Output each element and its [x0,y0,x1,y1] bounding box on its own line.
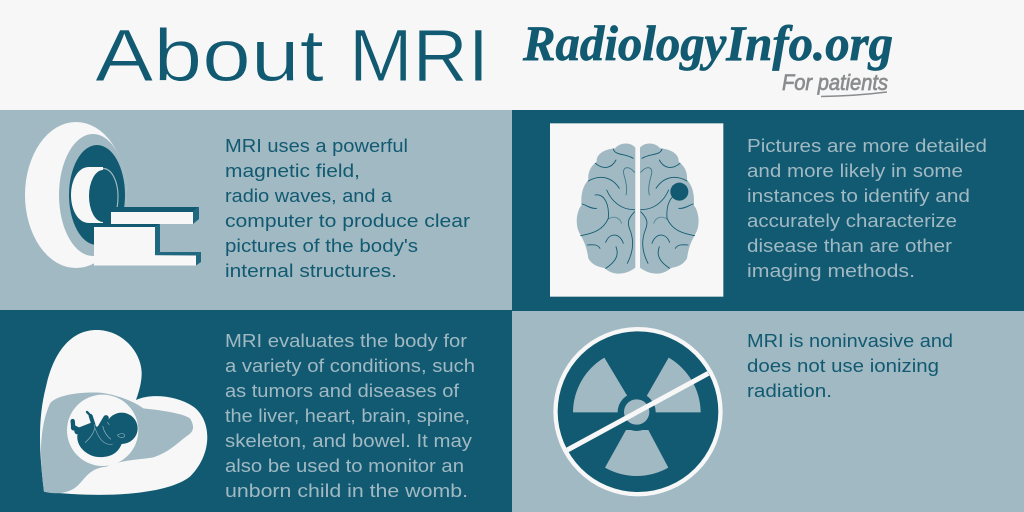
text block: conditions [225,330,475,501]
text block: noninvasive: does not use ionizing [747,355,939,376]
text block: picture detail: and more likely in some [747,160,963,181]
text block: how MRI works [225,135,470,281]
text block: conditions: also be used to monitor an [225,455,464,476]
logo: RadiologyInfo.org For patients: For patients [782,70,888,95]
title [95,14,489,97]
text block: picture detail: disease than are other [747,235,952,256]
title: About [95,14,325,97]
text block: picture detail: instances to identify and [747,185,970,206]
text block: conditions: skeleton, and bowel. It may [225,430,473,451]
icon: crossed-out radiation symbol [553,327,723,496]
text block: noninvasive: MRI is noninvasive and [747,330,953,351]
text block: picture detail: imaging methods. [747,260,915,281]
text block: picture detail: accurately characterize [747,210,957,231]
logo: RadiologyInfo.org For patients [522,15,893,96]
icon: womb with fetus [40,330,207,495]
panel: brain image [512,110,1024,311]
text block: how MRI works: magnetic field, [225,160,360,181]
text block: noninvasive [747,330,953,401]
text block: how MRI works: radio waves, and a [225,185,393,206]
logo: RadiologyInfo.org For patients: RadiologyInfo.org [522,15,893,71]
panel: conditions evaluated [0,310,512,512]
panel: no ionizing radiation [512,311,1024,512]
header band [0,0,1024,110]
text block: picture detail: Pictures are more detailed [747,135,987,156]
text block: picture detail [747,135,987,281]
text block: how MRI works: computer to produce clear [225,210,470,231]
panel: MRI scanner [0,110,512,310]
text block: conditions: MRI evaluates the body for [225,330,467,351]
text block: conditions: unborn child in the womb. [225,480,468,501]
text block: conditions: the liver, heart, brain, spine, [225,405,470,426]
text block: how MRI works: MRI uses a powerful [225,135,408,156]
icon: brain scan with lesion [550,123,723,297]
text block: conditions: a variety of conditions, such [225,355,475,376]
text block: how MRI works: internal structures. [225,260,397,281]
text block: noninvasive: radiation. [747,380,832,401]
icon: MRI scanner [25,122,201,268]
text block: how MRI works: pictures of the body's [225,235,418,256]
text block: conditions: as tumors and diseases of [225,380,460,401]
title: MRI [349,14,489,97]
